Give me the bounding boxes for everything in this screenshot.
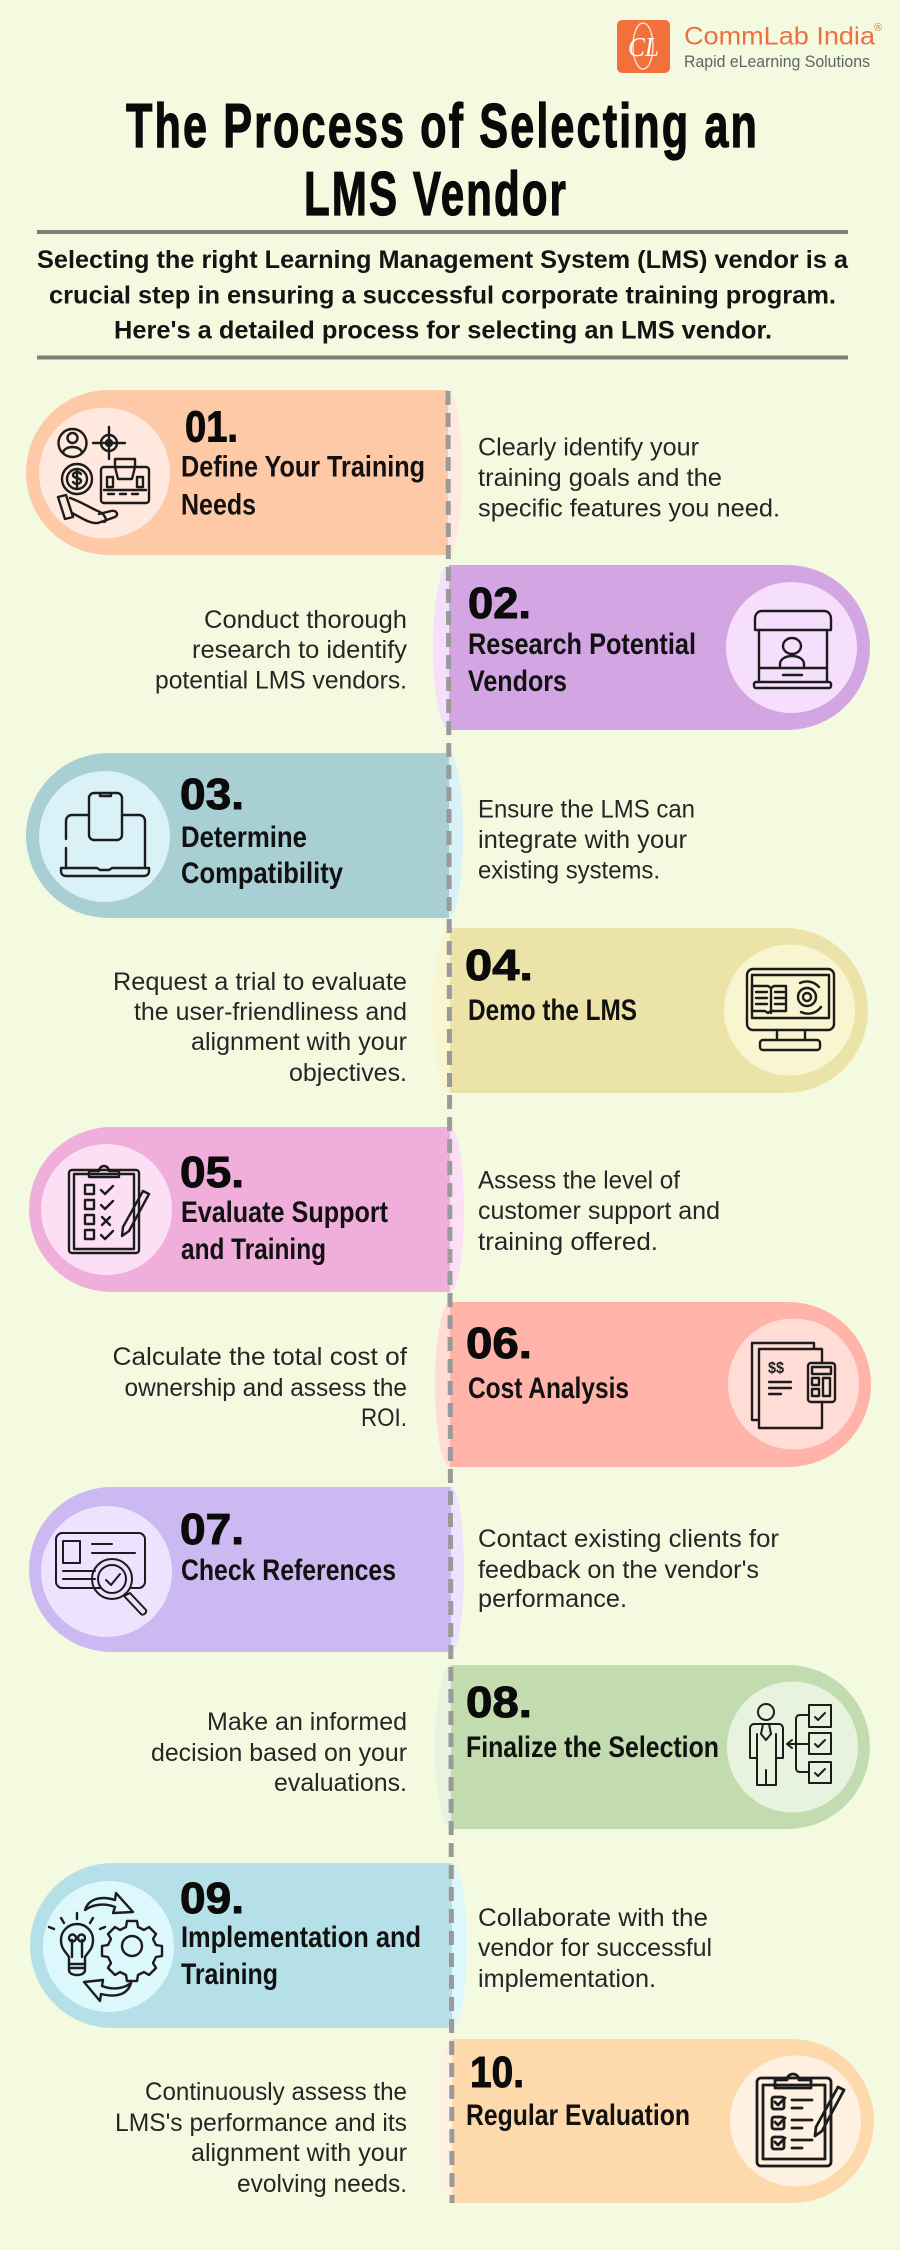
step 02 text [468,579,696,698]
step 01 description: training goals and the [478,464,722,492]
step 10 description: LMS's performance and its [115,2109,407,2137]
step 06 text: 06. [466,1319,532,1368]
step 04 description: Request a trial to evaluate [113,968,407,996]
step 09 text: Implementation and [181,1921,421,1954]
step 09 description [478,1904,712,1993]
intro text: crucial step in ensuring a successful corporate training program. [49,282,836,310]
step 07 text: Check References [181,1554,396,1587]
timeline dashed line [448,391,452,2203]
icon: monitor with book and gear [747,969,834,1050]
step 09 description: Collaborate with the [478,1904,708,1932]
step 06 description: ROI. [361,1404,407,1432]
step 04 description: the user-friendliness and [134,998,407,1026]
intro text: Selecting the right Learning Management System (LMS) vendor is a [37,246,849,274]
panel: step 05 shape [29,1127,464,1292]
step 08 description [151,1708,407,1797]
step 01 description: specific features you need. [478,494,780,522]
step 05 text: and Training [181,1233,326,1266]
step 05 description: customer support and [478,1197,720,1225]
step 10 text: 10. [470,2048,524,2097]
step 01 text: Define Your Training [181,450,425,484]
panel: step 09 shape [30,1863,467,2028]
step 09 text: Training [181,1958,278,1991]
step 01 description: Clearly identify your [478,434,699,462]
icon: person choosing between checklists [750,1704,831,1785]
step 10 text [466,2048,690,2132]
step 02 description: Conduct thorough [204,606,407,634]
step 09 description: implementation. [478,1965,656,1993]
logo: CommLab India: CL [628,32,659,62]
step 08 description: evaluations. [274,1769,407,1797]
icon: ID card under magnifier [56,1533,146,1615]
step 02 description: potential LMS vendors. [155,666,407,694]
step 05 description: Assess the level of [478,1166,680,1194]
step 06 text [466,1319,629,1405]
step 08 text: Finalize the Selection [466,1731,719,1764]
step 05 text: 05. [180,1148,244,1197]
logo: CommLab India: Rapid eLearning Solutions [684,52,870,71]
step 06 text: Cost Analysis [468,1372,629,1405]
intro text [37,246,849,344]
step 03 text: Determine [181,821,307,854]
icon: clipboard checklist [757,2074,844,2166]
panel: step 02 shape [433,565,870,730]
step 10 description: alignment with your [191,2139,407,2167]
step 04 text: Demo the LMS [468,994,637,1027]
intro text: Here's a detailed process for selecting an LMS vendor. [114,316,772,344]
step 08 description: decision based on your [151,1739,407,1767]
step 04 description [113,968,407,1087]
step 01 text [181,402,425,522]
step 07 description: feedback on the vendor's [478,1556,759,1584]
step 06 description: Calculate the total cost of [112,1343,407,1371]
panel: step 06 shape [435,1302,871,1467]
panel: step 03 shape [26,752,463,918]
icon: vendor booth [754,611,831,688]
icon: light bulb, gear and cycle arrows [49,1893,162,2001]
step 05 text: Evaluate Support [181,1196,388,1229]
step 02 text: Research Potential [468,628,696,661]
step 02 description: research to identify [192,636,408,664]
logo: CommLab India [617,20,882,73]
panel: step 01 shape [26,390,462,555]
icon: clipboard checklist with pencil [69,1166,149,1253]
title [126,92,759,229]
step 04 text: 04. [465,941,533,990]
icon: goals, target, briefcase and hand [58,427,149,523]
step 05 description [478,1166,720,1256]
step 03 description: Ensure the LMS can [478,796,695,824]
step 03 description [478,796,695,884]
step 07 description: performance. [478,1585,627,1613]
icon: invoice and calculator [752,1343,835,1428]
icon: invoice and calculator: $$ [768,1360,784,1377]
step 02 description [155,606,408,694]
step 01 text: 01. [185,402,238,452]
icon: phone and laptop [61,793,149,876]
step 07 text [180,1505,396,1587]
step 10 text: Regular Evaluation [466,2099,690,2132]
step 07 description [478,1525,779,1613]
step 07 description: Contact existing clients for [478,1525,779,1553]
step 03 text: Compatibility [181,857,343,890]
step 04 text [465,941,637,1027]
step 04 description: alignment with your [191,1028,407,1056]
step 06 description [112,1343,407,1432]
step 09 description: vendor for successful [478,1934,712,1962]
step 10 description [115,2078,407,2198]
step 04 description: objectives. [289,1059,407,1087]
step 09 text: 09. [180,1874,244,1923]
step 10 description: Continuously assess the [145,2078,407,2106]
step 03 text: 03. [180,770,244,819]
step 02 text: Vendors [468,665,567,698]
logo: CommLab India: ® [874,22,882,34]
step 08 text [466,1678,719,1764]
step 08 description: Make an informed [207,1708,407,1736]
step 03 description: integrate with your [478,826,687,854]
step 02 text: 02. [468,579,531,628]
step 09 text [180,1874,421,1991]
step 05 description: training offered. [478,1228,658,1256]
logo: CommLab India: CommLab India [684,22,875,50]
step 06 description: ownership and assess the [124,1374,407,1402]
step 03 description: existing systems. [478,856,660,884]
title: LMS Vendor [304,160,568,229]
step 08 text: 08. [466,1678,532,1727]
step 07 text: 07. [180,1505,244,1554]
step 01 description [478,434,780,522]
panel: step 10 shape [437,2039,874,2203]
step 03 text [180,770,343,890]
step 05 text [180,1148,388,1266]
panel: step 08 shape [435,1665,870,1829]
panel: step 07 shape [29,1487,464,1652]
step 01 text: Needs [181,488,256,522]
step 10 description: evolving needs. [237,2170,407,2198]
panel: step 04 shape [433,928,868,1093]
